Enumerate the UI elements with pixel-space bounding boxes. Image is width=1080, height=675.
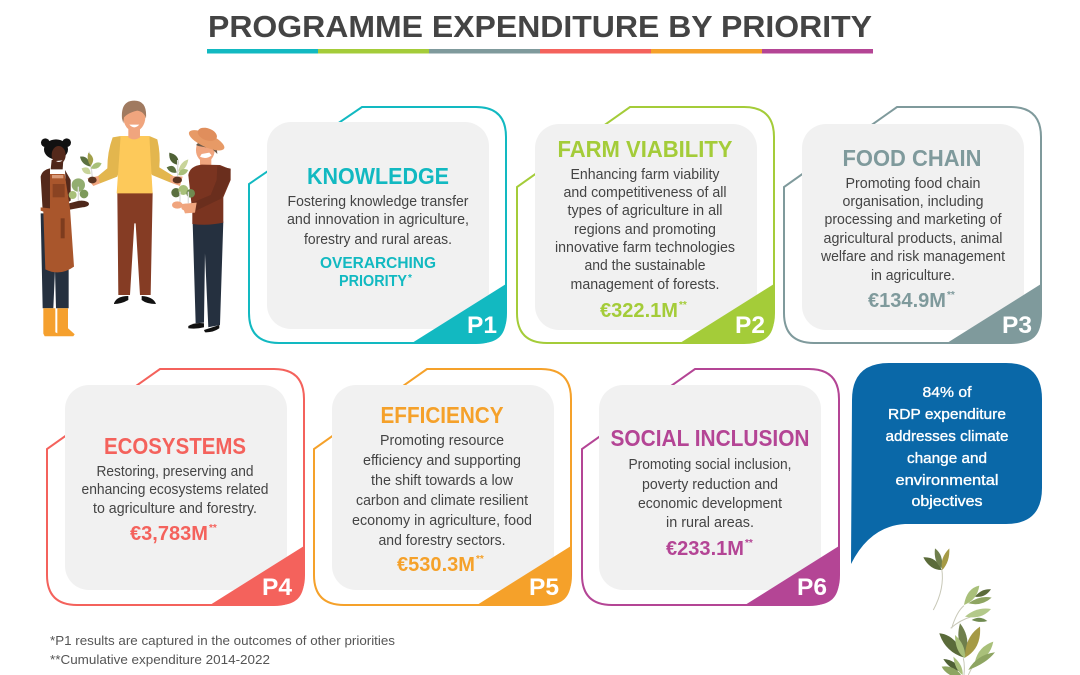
panel: P3 food chain [784, 107, 1041, 343]
P6 description: poverty reduction and [642, 477, 778, 493]
P4 expenditure: €3,783M [130, 523, 208, 545]
P2 description: Enhancing farm viability [570, 167, 720, 183]
P3 description: Promoting food chain [846, 176, 980, 192]
title: PROGRAMME EXPENDITURE BY PRIORITY [208, 9, 872, 44]
P2 description: management of forests. [570, 277, 720, 293]
P2 heading: FARM VIABILITY [558, 136, 732, 162]
P5 description: carbon and climate resilient [356, 493, 528, 509]
panel: P4 ecosystems [47, 369, 304, 605]
footnotes: **Cumulative expenditure 2014-2022 [50, 653, 270, 667]
panel: P1 knowledge [249, 107, 506, 343]
P5 description: efficiency and supporting [363, 453, 521, 469]
P2 description: innovative farm technologies [555, 240, 735, 256]
callout: climate share: environmental [896, 473, 998, 489]
P4 heading: ECOSYSTEMS [104, 433, 246, 459]
panel: P5 efficiency [314, 369, 571, 605]
P3 card shapes [784, 107, 1041, 343]
P3 heading: FOOD CHAIN [842, 145, 982, 171]
P4 card shapes [47, 369, 304, 605]
P3 description: processing and marketing of [824, 212, 1002, 228]
callout: climate share: change and [907, 451, 987, 467]
P4 expenditure: ** [209, 523, 217, 534]
P2 description: and competitiveness of all [564, 185, 726, 201]
P4 description: to agriculture and forestry. [93, 501, 257, 517]
P2 description: and the sustainable [584, 258, 706, 274]
P6 card shapes [582, 369, 839, 605]
P5 heading: EFFICIENCY [380, 402, 504, 428]
title colour bar [207, 49, 873, 54]
callout: climate share [851, 363, 1042, 564]
P1 overarching priority: PRIORITY [339, 273, 407, 290]
panel: P6 social inclusion [582, 369, 839, 605]
P6 badge label: P6 [797, 574, 827, 601]
P2 expenditure: €322.1M [600, 300, 678, 322]
P5 badge label: P5 [529, 574, 559, 601]
P1 badge label: P1 [467, 312, 497, 339]
P1 heading: KNOWLEDGE [307, 163, 449, 189]
P2 description: types of agriculture in all [568, 203, 722, 219]
P1 description: and innovation in agriculture, [287, 212, 469, 228]
P6 description: in rural areas. [666, 515, 754, 531]
P5 description: and forestry sectors. [378, 533, 506, 549]
P5 description: Promoting resource [380, 433, 504, 449]
P6 heading: SOCIAL INCLUSION [610, 425, 810, 451]
P5 expenditure: ** [476, 554, 484, 565]
P3 description: organisation, including [842, 194, 984, 210]
callout: climate share: RDP expenditure [888, 407, 1006, 423]
P3 expenditure: €134.9M [868, 290, 946, 312]
P1 overarching priority: * [408, 273, 412, 284]
P3 description: welfare and risk management [820, 249, 1005, 265]
P1 card shapes [249, 107, 506, 343]
P6 expenditure: €233.1M [666, 538, 744, 560]
illustration: three farmers holding seedlings [41, 101, 231, 336]
P5 card shapes [314, 369, 571, 605]
P6 description: economic development [638, 496, 782, 512]
P1 description [287, 194, 469, 248]
figure: man in yellow sweater [87, 101, 183, 304]
footnotes [50, 634, 395, 667]
figure: woman in apron [41, 138, 82, 336]
P2 badge label: P2 [735, 312, 765, 339]
P3 description: agricultural products, animal [824, 231, 1002, 247]
P6 description: Promoting social inclusion, [628, 457, 792, 473]
P3 description: in agriculture. [871, 268, 955, 284]
footnotes: *P1 results are captured in the outcomes of other priorities [50, 634, 395, 648]
panel: P2 farm viability [517, 107, 774, 343]
callout: climate share: objectives [912, 494, 982, 510]
P3 expenditure: ** [947, 290, 955, 301]
P6 expenditure: ** [745, 538, 753, 549]
P3 badge label: P3 [1002, 312, 1032, 339]
P1 overarching priority: OVERARCHING [320, 255, 436, 272]
P5 expenditure: €530.3M [397, 554, 475, 576]
P2 expenditure: ** [679, 300, 687, 311]
P3 description [820, 176, 1005, 284]
seedlings [69, 152, 195, 211]
callout: climate share: addresses climate [886, 429, 1008, 445]
P4 description: enhancing ecosystems related [82, 482, 268, 498]
P4 description: Restoring, preserving and [96, 464, 254, 480]
P4 description [82, 464, 268, 517]
P1 description: Fostering knowledge transfer [288, 194, 469, 210]
callout: climate share: 84% of [922, 385, 973, 401]
P2 card shapes [517, 107, 774, 343]
P2 description: regions and promoting [574, 222, 716, 238]
P1 overarching priority [320, 255, 436, 290]
P2 description [555, 167, 735, 293]
P6 description [628, 457, 792, 531]
P4 badge label: P4 [262, 574, 293, 601]
figure: man in straw hat [182, 125, 231, 332]
P5 description: economy in agriculture, food [352, 513, 532, 529]
P1 description: forestry and rural areas. [304, 232, 452, 248]
P5 description [352, 433, 532, 549]
icon: decorative leaves [923, 548, 995, 675]
P5 description: the shift towards a low [371, 473, 514, 489]
